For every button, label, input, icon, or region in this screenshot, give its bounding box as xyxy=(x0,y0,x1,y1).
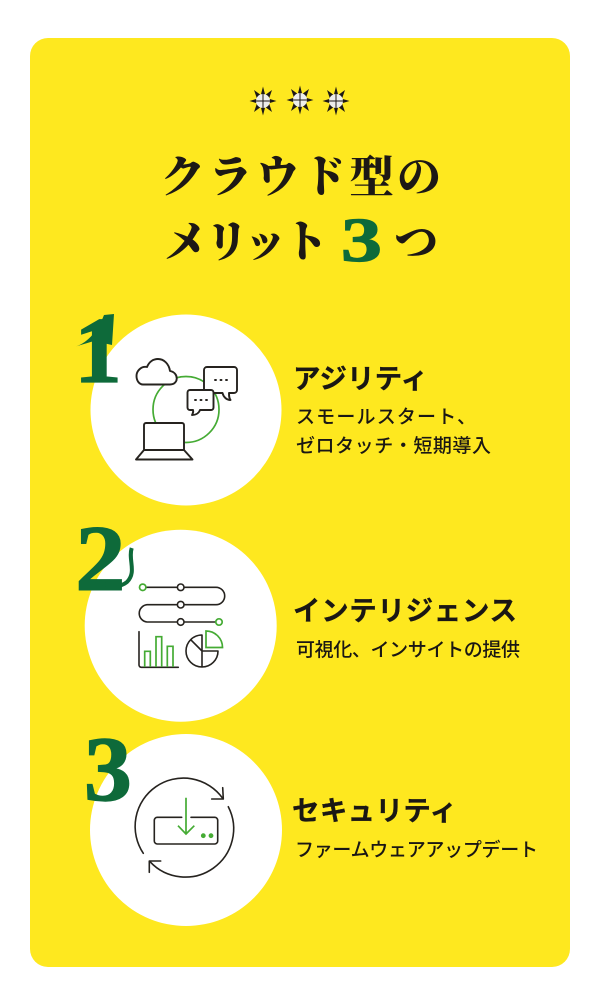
white circle 2 xyxy=(85,530,277,722)
icon: three decorative stars xyxy=(250,86,350,116)
heading: インテリジェンス: インテリジェンス xyxy=(293,595,517,626)
text: merit 2 description: 可視化、インサイトの提供 xyxy=(296,639,520,661)
icon: firmware update cycle xyxy=(135,778,234,877)
text: merit 1 description xyxy=(296,406,491,457)
heading: アジリティ: アジリティ xyxy=(293,363,428,394)
heading: セキュリティ: セキュリティ xyxy=(292,795,457,826)
number 2: 2 xyxy=(75,507,126,611)
title: つ xyxy=(394,218,438,267)
text: merit 3 description: ファームウェアアップデート xyxy=(295,838,538,861)
title: 3 xyxy=(341,205,382,275)
panel: merit 3 xyxy=(84,719,282,926)
title xyxy=(161,153,441,275)
white circle 3 xyxy=(90,734,282,926)
text: merit 1 description: ゼロタッチ・短期導入 xyxy=(296,435,491,457)
text: merit 1 description: スモールスタート、 xyxy=(296,406,476,428)
number 3: 3 xyxy=(84,719,132,821)
panel: merit 2 xyxy=(75,507,277,722)
white circle 1 xyxy=(90,314,282,506)
icon: flow line and charts xyxy=(139,584,225,667)
icon: cloud, chat and laptop xyxy=(136,359,237,460)
title: メリット xyxy=(164,218,328,267)
panel: merit 1 xyxy=(74,298,282,506)
number 1: 1 xyxy=(74,298,122,403)
title: クラウド型の xyxy=(161,153,441,202)
